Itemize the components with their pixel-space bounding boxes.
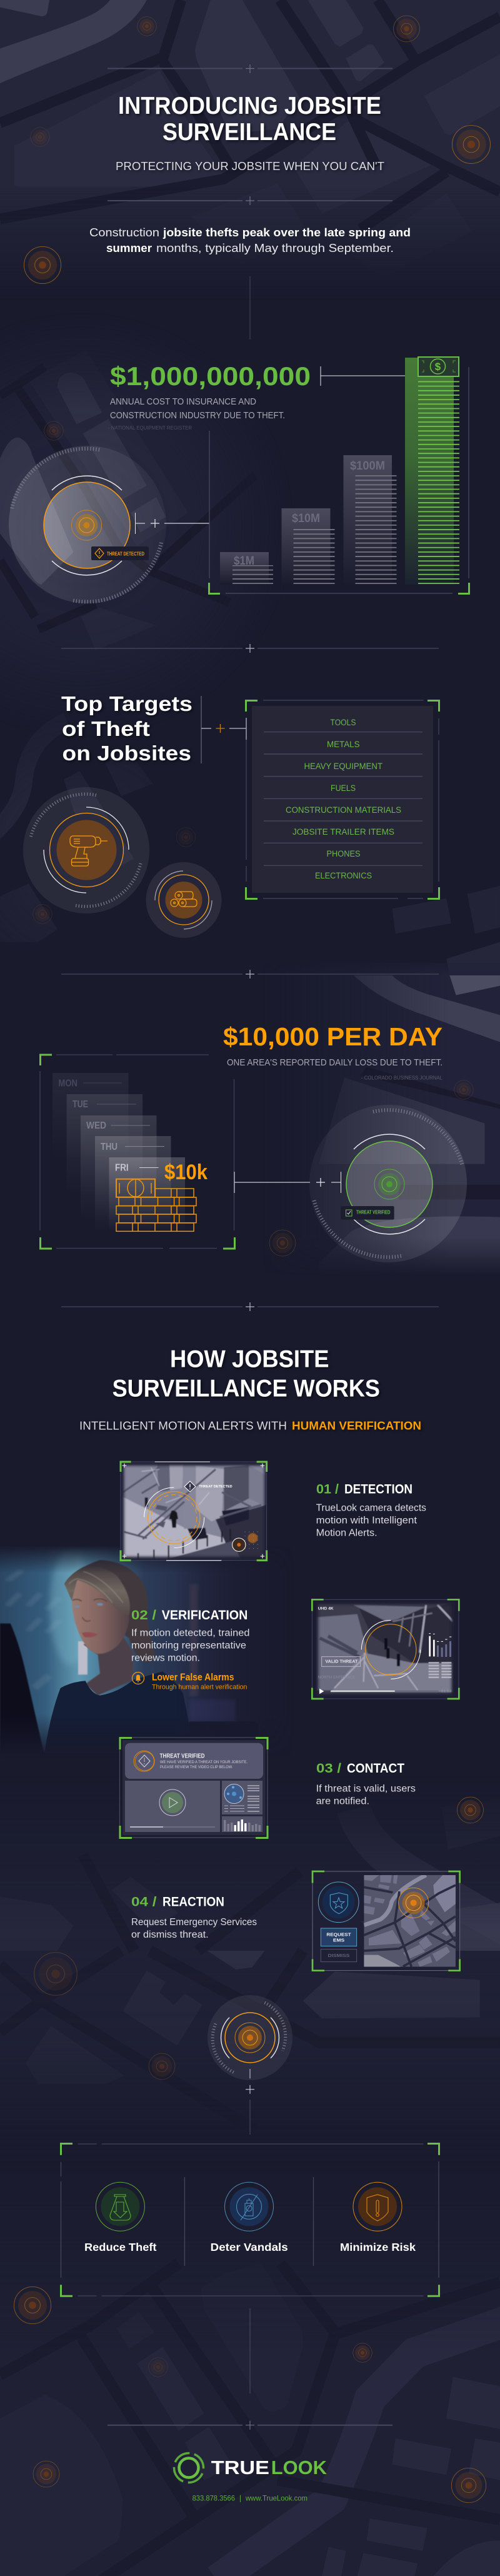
vertical connector footer [249, 2308, 251, 2393]
stat description: daily loss: ONE AREA'S REPORTED DAILY LOSS DUE TO THEFT. [227, 1058, 442, 1068]
step 01 text: TrueLook camera detects [316, 1503, 426, 1514]
image 04: reaction map: EMS [333, 1938, 344, 1943]
divider footer [108, 2421, 392, 2430]
title: SURVEILLANCE [162, 119, 336, 146]
step 04 heading [131, 1894, 224, 1909]
image 01: threat detection [121, 1462, 267, 1561]
subheading: how it works: INTELLIGENT MOTION ALERTS WITH [79, 1419, 287, 1432]
heading: top targets: of Theft [62, 717, 150, 740]
list items: ELECTRONICS [315, 871, 372, 880]
weekday cards: WED [86, 1120, 106, 1131]
panel: theft list [246, 700, 439, 899]
bar labels [234, 460, 385, 568]
icon: minimize risk [353, 2182, 402, 2231]
background map: targets section [0, 750, 134, 930]
intro text: Construction [89, 226, 159, 239]
camera scene [122, 1464, 267, 1559]
background map: top [0, 0, 500, 246]
image frame [312, 1599, 459, 1699]
stat description: CONSTRUCTION INDUSTRY DUE TO THEFT. [110, 411, 285, 421]
heading: top targets [61, 692, 192, 765]
center target [208, 1995, 292, 2080]
step 01 text: Motion Alerts. [316, 1528, 378, 1539]
map target [399, 1888, 429, 1918]
bar labels: $1M [234, 555, 254, 568]
background map: how it works lower [0, 1824, 500, 2084]
alert icon [134, 1751, 154, 1771]
step 02 heading: VERIFICATION [162, 1608, 248, 1623]
list items: HEAVY EQUIPMENT [304, 762, 382, 771]
list items: CONSTRUCTION MATERIALS [286, 805, 401, 815]
image 02: verification: NORTH ENTRANCE [318, 1676, 355, 1679]
title: INTRODUCING JOBSITE [118, 93, 381, 119]
image 03: threat notification [120, 1738, 268, 1838]
step 03 text [316, 1784, 416, 1807]
image 04: reaction map: DISMISS [328, 1953, 349, 1958]
threat detected badge: THREAT DETECTED [107, 550, 144, 556]
left target: threat detected [9, 446, 166, 603]
list items: TOOLS [330, 718, 356, 727]
step 03 heading: 03 / [316, 1761, 341, 1776]
button: dismiss [321, 1950, 357, 1962]
title [118, 93, 381, 146]
image 03: threat notification: THREAT VERIFIED [160, 1753, 205, 1760]
map [364, 1875, 456, 1967]
weekday cards: MON [58, 1079, 78, 1089]
step 04 heading: 04 / [131, 1894, 157, 1909]
source note: Colorado: - COLORADO BUSINESS JOURNAL [361, 1075, 442, 1081]
mini bar chart [224, 1819, 261, 1831]
benefit labels: Minimize Risk [340, 2241, 416, 2253]
image frame [312, 1871, 460, 1971]
divider section 2 [61, 644, 439, 653]
weekday cards [52, 1073, 185, 1232]
bar labels: $100M [350, 460, 385, 473]
step 04 text: or dismiss threat. [131, 1929, 209, 1940]
right target: threat verified [309, 1105, 467, 1262]
intro text: jobsite thefts peak over the late spring and [162, 226, 411, 239]
step 02 text: reviews motion. [131, 1653, 200, 1664]
subheading: how it works: HUMAN VERIFICATION [292, 1419, 421, 1432]
divider below subtitle [108, 196, 392, 205]
threat detected badge [91, 546, 149, 560]
image 02: verification: VALID THREAT [325, 1660, 358, 1664]
icon: dollar bill: $ [435, 361, 441, 373]
stat description [110, 397, 285, 421]
divider section 4 [61, 1302, 439, 1311]
weekday cards: THU [101, 1142, 118, 1152]
step 03 heading: CONTACT [347, 1761, 404, 1776]
image 03: threat notification: WE HAVE VERIFIED A THREAT ON YOUR JOBSITE. [160, 1760, 248, 1764]
step 04 text [131, 1917, 257, 1940]
stat: ten thousand per day: $10,000 PER DAY [223, 1022, 442, 1051]
step 01 heading: 01 / [316, 1482, 339, 1496]
icon: dollar bill [418, 357, 459, 376]
threat verified badge: THREAT VERIFIED [356, 1209, 391, 1215]
globe and data [224, 1784, 244, 1803]
image 02: verification: UHD 4K [318, 1607, 334, 1611]
list items: METALS [327, 740, 360, 749]
benefit labels: Deter Vandals [211, 2241, 288, 2253]
step 01 heading [316, 1482, 412, 1496]
callout: lower false alarms: Lower False Alarms [152, 1673, 234, 1683]
source note: - NATIONAL EQUIPMENT REGISTER [108, 425, 192, 431]
photo: monitoring representative [0, 1547, 238, 1752]
icon: police shield [318, 1882, 359, 1923]
connector: loss to target [234, 1172, 341, 1193]
contact line: www.TrueLook.com [245, 2495, 308, 2502]
callout: lower false alarms [132, 1672, 247, 1691]
panel: benefits [61, 2143, 439, 2296]
intro text: months, typically May through September. [156, 242, 394, 254]
heading: top targets: on Jobsites [62, 742, 191, 765]
benefit labels: Reduce Theft [84, 2241, 157, 2253]
intro text [89, 226, 411, 254]
bar labels: $10M [292, 512, 320, 525]
contact line: 833.878.3566 [192, 2495, 235, 2502]
image 02: verification [312, 1599, 459, 1699]
button: request EMS [321, 1928, 357, 1946]
image frame [121, 1462, 267, 1561]
list items: JOBSITE TRAILER ITEMS [292, 827, 394, 837]
stat: one billion: $1,000,000,000 [110, 361, 311, 391]
vertical connector [249, 276, 251, 340]
step 03 text: are notified. [316, 1796, 369, 1807]
background map: footer [0, 2284, 500, 2576]
icon: pipes target [146, 862, 221, 938]
benefit labels [84, 2241, 416, 2253]
step 01 text [316, 1503, 426, 1539]
icon: money stack [116, 1179, 196, 1231]
list items: FUELS [331, 783, 356, 793]
subheading: how it works [79, 1419, 421, 1432]
step 01 text: motion with Intelligent [316, 1516, 418, 1526]
weekday cards: FRI [115, 1163, 129, 1174]
weekday cards: TUE [72, 1099, 88, 1110]
image 04: reaction map [312, 1871, 460, 1971]
intro text: summer [106, 242, 152, 254]
heading: how it works: SURVEILLANCE WORKS [112, 1376, 380, 1402]
step 02 heading: 02 / [131, 1608, 156, 1623]
list items [286, 718, 401, 880]
step 03 heading [316, 1761, 404, 1776]
step 01 heading: DETECTION [344, 1482, 412, 1496]
step 02 text [131, 1628, 250, 1664]
step 04 heading: REACTION [162, 1894, 224, 1909]
detection overlay [148, 1492, 200, 1544]
threat verified badge [341, 1206, 394, 1220]
image 01: threat detection: THREAT DETECTED [199, 1485, 232, 1489]
camera scene [316, 1602, 454, 1696]
connector to bars [135, 513, 209, 534]
callout: lower false alarms: Through human alert verification [152, 1684, 247, 1691]
image 04: reaction map: REQUEST [326, 1932, 351, 1938]
connector: target to benefits [246, 2069, 254, 2135]
list items: PHONES [326, 849, 360, 858]
ten k label: $10k [164, 1160, 208, 1184]
step 02 text: monitoring representative [131, 1641, 246, 1651]
verification overlay [366, 1624, 416, 1675]
contact line: | [239, 2495, 241, 2502]
logo: TrueLook: LOOK [271, 2457, 328, 2478]
image 02: verification: 01:13 [441, 1689, 451, 1693]
contact line [192, 2495, 308, 2502]
stat description: ANNUAL COST TO INSURANCE AND [110, 397, 256, 407]
video player [159, 1789, 186, 1816]
icon: reduce theft [96, 2182, 144, 2231]
subtitle: PROTECTING YOUR JOBSITE WHEN YOU CAN'T [116, 159, 384, 173]
background map: left target area [0, 370, 221, 665]
divider section 3 [61, 970, 439, 979]
stat connector [321, 366, 411, 386]
connector: heading to list [201, 696, 246, 763]
step 03 text: If threat is valid, users [316, 1784, 416, 1794]
panel: weekdays and money [40, 1055, 235, 1249]
bar chart: cost scale [209, 357, 469, 594]
step 04 text: Request Emergency Services [131, 1917, 257, 1928]
heading: how it works [112, 1346, 380, 1402]
step 02 text: If motion detected, trained [131, 1628, 250, 1639]
logo: TrueLook [169, 2448, 328, 2487]
logo: TrueLook: TRUE [211, 2457, 269, 2478]
icon: deter vandals [225, 2182, 274, 2231]
background map: targets section right blocks [392, 886, 500, 975]
divider top [108, 64, 392, 73]
image 03: threat notification: PLEASE REVIEW THE VIDEO CLIP BELOW. [160, 1765, 232, 1769]
background map: loss section right [319, 969, 500, 1266]
icon: drill target [23, 787, 149, 913]
heading: how it works: HOW JOBSITE [170, 1346, 329, 1373]
heading: top targets: Top Targets [61, 692, 192, 715]
